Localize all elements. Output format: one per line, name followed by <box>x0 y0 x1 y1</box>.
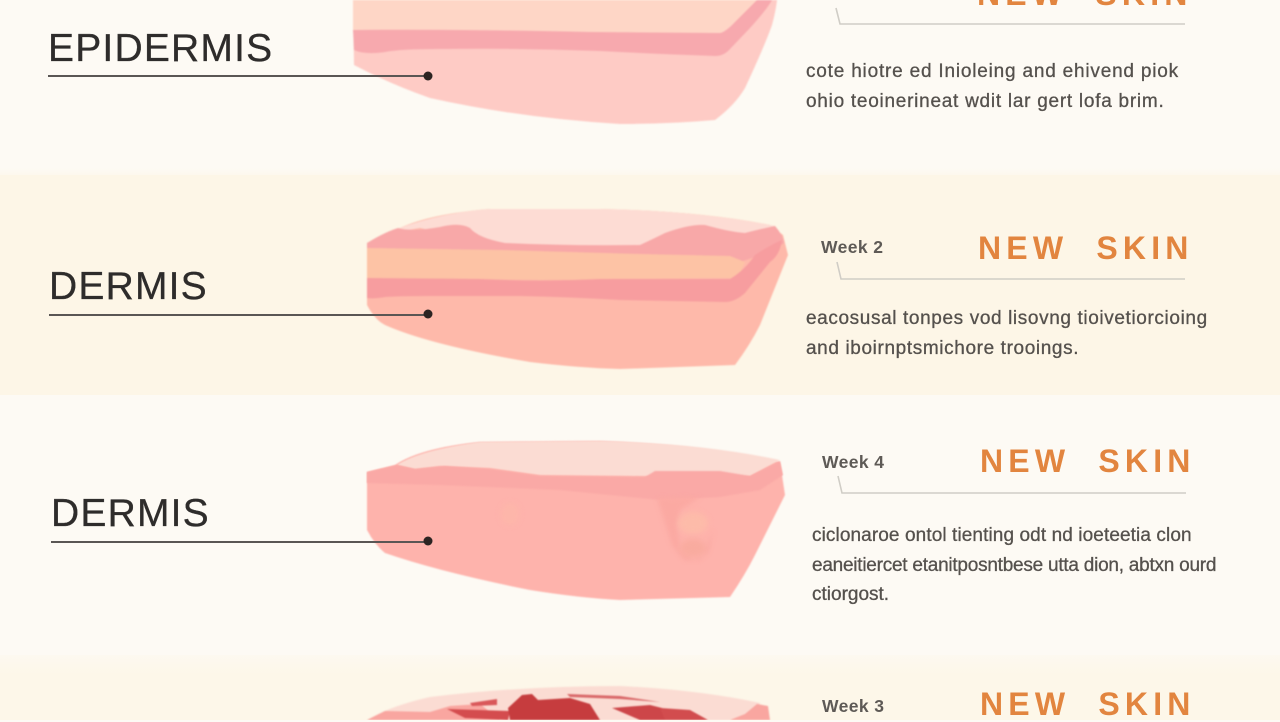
description: row 3 <box>812 525 1216 605</box>
week label: row 2: Week 2 <box>821 237 883 257</box>
heading: new skin, row 4: NEW SKIN <box>980 686 1196 722</box>
heading: new skin, row 2: NEW SKIN <box>978 230 1194 266</box>
heading: new skin, row 3: NEW SKIN <box>980 443 1196 479</box>
skin block: epidermis <box>353 0 777 124</box>
week label: row 4: Week 3 <box>822 696 884 716</box>
leader line: epidermis <box>48 72 432 80</box>
description: row 3: ctiorgost. <box>812 584 889 605</box>
description: row 1: cote hiotre ed Inioleing and ehivend piok <box>806 61 1179 82</box>
skin block: dermis week 4 <box>367 441 785 600</box>
background band: row 2 <box>0 175 1280 395</box>
label: dermis: DERMIS <box>51 492 210 535</box>
week label: row 3: Week 4 <box>822 452 884 472</box>
label: epidermis: EPIDERMIS <box>48 27 273 70</box>
description: row 2: eacosusal tonpes vod lisovng tioivetiorcioing <box>806 308 1208 329</box>
description: row 1 <box>806 61 1179 112</box>
skin block: dermis week 2 <box>367 209 788 369</box>
description: row 2 <box>806 308 1208 358</box>
leader line: dermis week 4 <box>51 536 432 546</box>
skin block: wounded tissue <box>367 686 770 720</box>
background band: row 1 <box>0 0 1280 175</box>
background band: row 4 <box>0 655 1280 720</box>
description: row 1: ohio teoinerineat wdit lar gert lofa brim. <box>806 90 1164 112</box>
description: row 2: and iboirnptsmichore trooings. <box>806 338 1079 358</box>
leader line: dermis week 2 <box>49 310 432 318</box>
background band: row 3 <box>0 395 1280 655</box>
description: row 3: eaneitiercet etanitposntbese utta dion, abtxn ourd <box>812 554 1216 576</box>
label: dermis: DERMIS <box>49 265 208 308</box>
description: row 3: ciclonaroe ontol tienting odt nd ioeteetia clon <box>812 525 1192 546</box>
